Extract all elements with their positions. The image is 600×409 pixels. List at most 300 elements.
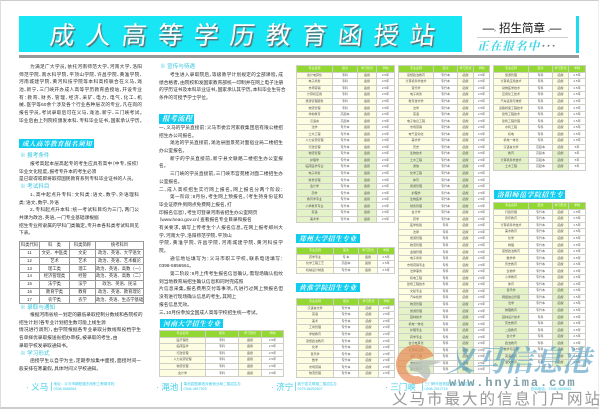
table: Huanghuai University majors: 函授 bbox=[365, 332, 372, 336]
table: majors column 3: 函授 bbox=[557, 99, 564, 103]
table: Huanghuai University majors: 2.5年 bbox=[383, 371, 390, 375]
table: Huanghuai University majors: 物流管理 bbox=[309, 371, 321, 375]
table: exam subject codes: 政治、英语、生态学基础 bbox=[96, 297, 143, 302]
section: eligibility: ※ 报考条件 bbox=[20, 153, 50, 159]
table: majors column 1: 专科 bbox=[342, 79, 348, 83]
intro paragraph: 为满足广大学员，依托河南师范大学、河南大学、洛阳 bbox=[30, 64, 142, 69]
table: Luoyang Normal University majors: 专业名称 bbox=[505, 203, 517, 207]
table: majors column 2: 函授 bbox=[462, 191, 468, 195]
table: Zhengzhou University majors: 专 本 bbox=[343, 255, 349, 259]
table: majors column 3: 5年 bbox=[575, 151, 579, 155]
table: majors column 2: 专升本 bbox=[441, 106, 450, 110]
table: Luoyang Normal University majors: 专升本 bbox=[536, 243, 545, 247]
table: majors column 2: 函授 bbox=[462, 250, 468, 254]
Yima address: 地址：义马市朝阳路东段职工教育学校 bbox=[54, 382, 115, 386]
table: majors column 1: 会计电算化 bbox=[307, 73, 322, 77]
table: exam subject codes: 13 bbox=[27, 266, 32, 271]
table: Huanghuai University majors: 英语 bbox=[312, 312, 318, 316]
table: majors column 1: 专升本 bbox=[340, 184, 350, 188]
table: majors column 3: 高起本 bbox=[536, 151, 545, 155]
table: majors column 2: 函授 bbox=[462, 256, 468, 260]
table: exam subject codes: 经管 bbox=[78, 273, 87, 278]
heading: Zhengzhou University majors: 郑州大学招生专业 bbox=[299, 233, 357, 243]
application process text: 片信息采集。报名费用交付等事项。凡进行过网上预报名但 bbox=[159, 286, 283, 291]
heading: Henan University majors: 河南大学招生专业 bbox=[163, 318, 221, 328]
table: Luoyang Normal University majors: 2.5年 bbox=[573, 243, 581, 247]
table: majors column 2: 2.5年 bbox=[478, 191, 485, 195]
table: majors column 2: 2.5年 bbox=[478, 335, 485, 339]
table: majors column 2: 2.5年 bbox=[478, 263, 485, 267]
table: majors column 2: 函授 bbox=[462, 263, 468, 267]
table: majors column 3: 动物医学技术 bbox=[502, 86, 520, 90]
table: majors column 2: 2.5年 bbox=[478, 256, 485, 260]
table: majors column 2: 电气自动化 bbox=[408, 132, 424, 136]
table: Luoyang Normal University majors: 小学教育 bbox=[505, 275, 517, 279]
table: majors column 1: 专升本 bbox=[340, 158, 350, 162]
table: majors column 2: 函授 bbox=[462, 145, 468, 149]
table: Luoyang Normal University majors: 函授 bbox=[557, 229, 564, 233]
table: Luoyang Normal University majors: 函授 bbox=[557, 301, 564, 305]
table: Luoyang Normal University majors: 网络信息管理 bbox=[502, 295, 520, 299]
application process text: 办公室报名。 bbox=[159, 148, 185, 153]
table: Luoyang Normal University majors: 专升本 bbox=[536, 249, 545, 253]
table: exam subject codes: 文史、中医类 bbox=[42, 250, 67, 255]
table: Luoyang Normal University majors: 物理 bbox=[508, 243, 514, 247]
table: majors column 3: 函授 bbox=[557, 119, 564, 123]
table: majors column 3: 专业名称 bbox=[505, 66, 517, 70]
table: majors column 2: 函授 bbox=[462, 125, 468, 129]
table: Luoyang Normal University majors: 2.5年 bbox=[573, 256, 581, 260]
table: majors column 3: 5年 bbox=[575, 158, 579, 162]
table: majors column 3: 计算机应用技术 bbox=[500, 79, 522, 83]
table: majors column 3: 专科 bbox=[537, 112, 544, 116]
table: majors column 2: 函授 bbox=[462, 112, 468, 116]
table: Huanghuai University majors: 专业名称 bbox=[309, 299, 321, 303]
table: majors column 1: 专科 bbox=[342, 106, 348, 110]
table: majors column 2: 电子商务 bbox=[410, 92, 422, 96]
table: majors column 2: 护理专业 bbox=[410, 328, 422, 332]
intro paragraph bbox=[19, 64, 142, 123]
Xinning address bbox=[295, 382, 348, 391]
application process text: 没有进行现场确认信息的考生，其网上 bbox=[159, 294, 236, 299]
table: majors column 1: 函授 bbox=[364, 125, 370, 129]
table: majors column 2: 专升本 bbox=[441, 204, 450, 208]
Xinning label: · 济宁 bbox=[271, 382, 293, 392]
table: majors column 3: 专科 bbox=[537, 99, 544, 103]
table: Luoyang Normal University majors: 美术教育 bbox=[505, 229, 517, 233]
admission text: 招生计划（各专业计划招生数可能上线生源 bbox=[19, 320, 106, 325]
table: majors column 2: 专升本 bbox=[441, 184, 450, 188]
table: majors column 2: 专科 bbox=[442, 302, 448, 306]
table: majors column 2: 市场营销专业 bbox=[407, 263, 425, 267]
table: majors column 2: 汽车检修 bbox=[410, 295, 422, 299]
table: majors column 1: 函授 bbox=[364, 164, 370, 168]
table: Zhengzhou University majors: 2.5年 bbox=[382, 261, 390, 265]
table: majors column 2: 专升本 bbox=[441, 151, 450, 155]
table: majors column 2: 文秘专业 bbox=[410, 289, 422, 293]
table: majors column 1: 函授 bbox=[364, 151, 370, 155]
table: Luoyang Normal University majors: 体育 bbox=[508, 282, 514, 286]
study format text: 般安排在寒暑假，具体时间义学校通知。 bbox=[19, 366, 99, 371]
table: majors column 2: 函授 bbox=[462, 367, 468, 371]
table: Luoyang Normal University majors: 英语教育 bbox=[505, 354, 517, 358]
table: majors column 2: 专科 bbox=[442, 230, 448, 234]
table: Luoyang Normal University majors: 专升本 bbox=[536, 210, 545, 214]
benefits text: 的学历证书及本科毕业证书，国家承认其学历。本科毕业生符合 bbox=[159, 87, 286, 92]
table: Luoyang Normal University majors: 2.5年 bbox=[573, 341, 581, 345]
table: majors column 2: 专科 bbox=[442, 250, 448, 254]
table: majors column 1: 2.5年 bbox=[382, 204, 389, 208]
table: majors column 1: 2.5年 bbox=[382, 79, 389, 83]
table: Luoyang Normal University majors: 函授 bbox=[557, 256, 564, 260]
table: majors column 2: 2.5年 bbox=[478, 348, 485, 352]
table: majors column 2: 2.5年 bbox=[478, 197, 485, 201]
table: majors column 3: 函授 bbox=[557, 112, 564, 116]
table: majors column 2: 2.5年 bbox=[478, 328, 485, 332]
table: majors column 1: 2.5年 bbox=[382, 164, 389, 168]
table: exam subject codes: 政治、英语、高数（一） bbox=[96, 266, 143, 271]
section: exam subjects: ※ 考试科目 bbox=[20, 184, 50, 190]
table: Luoyang Normal University majors: 2.5年 bbox=[573, 308, 581, 312]
table: majors column 2: 函授 bbox=[462, 276, 468, 280]
application process text: （www.heao.gov.cn）查看报名专业目录和报名 bbox=[159, 217, 252, 222]
table: Luoyang Normal University majors: 2.5年 bbox=[573, 269, 581, 273]
table: Luoyang Normal University majors: 函授 bbox=[557, 249, 564, 253]
table: Luoyang Normal University majors: 函授 bbox=[557, 216, 564, 220]
table: exam subject codes: 艺术 bbox=[78, 258, 87, 263]
table: majors column 2: 专升本 bbox=[441, 217, 450, 221]
table: majors column 1: 物流管理 bbox=[308, 151, 320, 155]
table: majors column 1: 函授 bbox=[364, 197, 370, 201]
table: majors column 3: 2.5年 bbox=[573, 92, 581, 96]
table: Luoyang Normal University majors: 函授 bbox=[557, 282, 564, 286]
table: majors column 2: 医学检验 bbox=[410, 223, 422, 227]
table: Luoyang Normal University majors: 函授 bbox=[557, 243, 564, 247]
table: majors column 1: 专升本 bbox=[340, 210, 350, 214]
table: Huanghuai University majors: 层次 bbox=[343, 299, 349, 303]
Xinning address: 新宁县文联路二楼招生办 bbox=[298, 382, 337, 386]
table: Luoyang Normal University majors: 二级教育 bbox=[505, 328, 517, 332]
table: majors column 3: 2.5年 bbox=[573, 125, 581, 129]
table: Luoyang Normal University majors: 函授 bbox=[557, 315, 564, 319]
table: exam subject codes: 11 bbox=[27, 250, 32, 255]
table: Luoyang Normal University majors: 语文教育 bbox=[505, 360, 517, 364]
table: exam subject codes: 科 类 bbox=[48, 242, 61, 247]
table: Luoyang Normal University majors: 函授 bbox=[557, 210, 564, 214]
table: majors column 3: 专科 bbox=[537, 79, 544, 83]
table: Huanghuai University majors: 2.5年 bbox=[383, 345, 390, 349]
table: Luoyang Normal University majors: 专科 bbox=[537, 354, 544, 358]
table: majors column 2: 专升本 bbox=[441, 119, 450, 123]
table: Luoyang Normal University majors: 函授 bbox=[557, 308, 564, 312]
table: majors column 1: 函授 bbox=[364, 112, 370, 116]
section: admission notice: ※ 录取与通知 bbox=[20, 305, 55, 311]
table: Luoyang Normal University majors: 生物学 bbox=[506, 269, 516, 273]
table: Henan University majors: 2.5年 bbox=[269, 357, 276, 361]
table: majors column 3: 5年 bbox=[575, 164, 579, 168]
table: majors column 2: 专升本 bbox=[441, 112, 450, 116]
table: majors column 2: 财务管理 bbox=[410, 204, 422, 208]
table: Henan University majors: 物流管理 bbox=[176, 364, 188, 368]
table: majors column 3: 专科 bbox=[537, 138, 544, 142]
table: majors column 3: 2.5年 bbox=[573, 99, 581, 103]
table: Luoyang Normal University majors: 函授 bbox=[557, 295, 564, 299]
admission text: 根据河南省统一划定的最低录取控制分数线和各院校的 bbox=[30, 312, 143, 317]
table: majors column 1: 2.5年 bbox=[382, 73, 389, 77]
table: majors column 1: 物流管理 bbox=[308, 106, 320, 110]
table: Luoyang Normal University majors: 函授 bbox=[557, 288, 564, 292]
table: Luoyang Normal University majors: 2.5年 bbox=[573, 295, 581, 299]
table: exam subject codes: 15 bbox=[27, 281, 32, 286]
application process text: 学院、黄淮学院、许昌学院、河南城建学院、黄河科技学 bbox=[159, 240, 283, 245]
application process text: 到当地教育局招生确认信息和同时完成照 bbox=[159, 279, 243, 284]
table: majors column 1: 专升本 bbox=[340, 132, 350, 136]
application process text: 二、成人高校招生实行网上报名。网上报名分两个阶段： bbox=[159, 186, 283, 192]
table: Luoyang Normal University majors: 园林设计技术 bbox=[502, 315, 520, 319]
table: Huanghuai University majors: 2.5年 bbox=[383, 365, 390, 369]
table: majors column 2: 函授 bbox=[462, 106, 468, 110]
table: majors column 2: 专升本 bbox=[441, 132, 450, 136]
table: exam subject codes: 14 bbox=[27, 273, 32, 278]
table: majors column 2: 函授 bbox=[462, 171, 468, 175]
table: majors column 1: 专升本 bbox=[340, 217, 350, 221]
table: Huanghuai University majors: 专升本 bbox=[341, 312, 350, 316]
table: majors column 2: 专科 bbox=[442, 256, 448, 260]
table: Huanghuai University majors: 思想政治教育 bbox=[306, 339, 324, 343]
table: majors column 2: 函授 bbox=[462, 328, 468, 332]
application process text: 渑池的学员直接前，渑池县图景苑对面宿业局二楼招生 bbox=[170, 140, 283, 145]
table: Huanghuai University majors: 函授 bbox=[365, 358, 372, 362]
table: majors column 2: 语文教育 bbox=[410, 367, 422, 371]
application process text: 名。 bbox=[159, 163, 166, 168]
table: exam subject codes: 科类代码 bbox=[21, 242, 38, 247]
table: Luoyang Normal University majors: 专升本 bbox=[536, 295, 545, 299]
table: majors column 1: 函授 bbox=[364, 79, 370, 83]
table: majors column 2: 2.5年 bbox=[478, 106, 485, 110]
table: majors column 3: 2.5年 bbox=[573, 86, 581, 90]
table: exam subject codes: 农学类 bbox=[48, 297, 61, 302]
table: majors column 1: 2.5年 bbox=[382, 210, 389, 214]
table: majors column 1: 2.5年 bbox=[382, 171, 389, 175]
table: majors column 2: 函授 bbox=[462, 322, 468, 326]
table: majors column 3: 专科 bbox=[537, 106, 544, 110]
table: majors column 2: 函授 bbox=[462, 230, 468, 234]
table: majors column 2: 2.5年 bbox=[478, 308, 485, 312]
table: majors column 2: 2.5年 bbox=[478, 125, 485, 129]
table: Huanghuai University majors: 化学 bbox=[312, 345, 318, 349]
table: majors column 2: 专升本 bbox=[441, 197, 450, 201]
table: Henan University majors: 医疗保险 bbox=[176, 338, 188, 342]
table: majors column 3: 专科 bbox=[537, 125, 544, 129]
table: majors column 2: 专升本 bbox=[441, 73, 450, 77]
table: Luoyang Normal University majors: 专升本 bbox=[536, 301, 545, 305]
table: majors column 2: 电子信息工程 bbox=[407, 119, 425, 123]
table: exam subject codes: 政治、英语、艺术概论 bbox=[98, 258, 141, 263]
table: Luoyang Normal University majors: 会计学 bbox=[506, 334, 516, 338]
table: Luoyang Normal University majors: 2.5年 bbox=[573, 334, 581, 338]
table: majors column 2: 2.5年 bbox=[478, 315, 485, 319]
table: exam subject codes: 政治、英语、大学语文 bbox=[98, 250, 141, 255]
table: majors column 2: 层次 bbox=[442, 66, 448, 70]
heading: Huanghuai University majors: 黄淮学院招生专业 bbox=[299, 282, 357, 292]
table: exam subject codes: 统考科目 bbox=[111, 242, 128, 247]
table: majors column 2: 函授 bbox=[462, 282, 468, 286]
table: Zhengzhou University majors: 2.5年 bbox=[382, 268, 390, 272]
table: Huanghuai University majors: 市场营销 bbox=[309, 365, 321, 369]
table: exam subject codes: 理工 bbox=[78, 266, 87, 271]
table: majors column 1: 专科 bbox=[342, 92, 348, 96]
table: Luoyang Normal University majors: 2.5年 bbox=[573, 354, 581, 358]
table: majors column 2: 专科 bbox=[442, 289, 448, 293]
table: Henan University majors: 行政管理 bbox=[176, 351, 188, 355]
table: majors column 2: 专升本 bbox=[441, 158, 450, 162]
table: Henan University majors: 2.5年 bbox=[269, 344, 276, 348]
table: majors column 2: 计算机应用 bbox=[408, 348, 424, 352]
table: Luoyang Normal University majors: 专升本 bbox=[536, 256, 545, 260]
application process text: 学、河南大学、洛阳师范学院、平顶山 bbox=[159, 233, 232, 238]
Yima address: 0398-5856561 bbox=[54, 387, 77, 391]
table: Huanghuai University majors: 专升本 bbox=[341, 345, 350, 349]
table: majors column 2: 专升本 bbox=[441, 125, 450, 129]
eligibility text: 是已取得或即将取得国民教育系列专科毕业证书的人员。 bbox=[19, 176, 134, 181]
table: majors column 1: 2.5年 bbox=[382, 86, 389, 90]
intro paragraph: 毕业后由上列院校颁发本科、专科毕业证书，国家承认学历。 bbox=[19, 118, 142, 123]
table: Henan University majors: 专业名称 bbox=[176, 331, 188, 335]
table: majors column 2: 函授 bbox=[462, 204, 468, 208]
table: majors column 2 bbox=[398, 65, 490, 374]
table: majors column 1: 2.5年 bbox=[382, 112, 389, 116]
table: majors column 2: 专科 bbox=[442, 354, 448, 358]
table: majors column 1: 行政管理 bbox=[308, 145, 320, 149]
table: majors column 2: 专科 bbox=[442, 243, 448, 247]
table: majors column 2: 生物医学 bbox=[410, 197, 422, 201]
exam subjects text: 2、专科起点升本科：统一考试科目均为三门，两门公 bbox=[30, 207, 139, 212]
table: exam subject codes: 艺术 bbox=[50, 258, 59, 263]
table: majors column 2: 电子商务 bbox=[410, 256, 422, 260]
table: majors column 2: 专科 bbox=[442, 295, 448, 299]
table: majors column 3: 教育 bbox=[508, 151, 514, 155]
table: majors column 2: 函授 bbox=[462, 184, 468, 188]
table: majors column 1: 护理学 bbox=[310, 158, 319, 162]
table: majors column 1: 2.5年 bbox=[382, 92, 389, 96]
table: Henan University majors: 学习形式 bbox=[244, 331, 256, 335]
table: Luoyang Normal University majors: 专升本 bbox=[536, 236, 545, 240]
table: Luoyang Normal University majors: 2.5年 bbox=[573, 301, 581, 305]
table: majors column 1: 2.5年 bbox=[382, 138, 389, 142]
table: Luoyang Normal University majors: 专科 bbox=[537, 360, 544, 364]
table: majors column 1: 函授 bbox=[364, 99, 370, 103]
application process text bbox=[159, 124, 283, 315]
application process text: 有关要求，填写上传考生个人报名信息。在网上报考郑州大 bbox=[159, 225, 283, 230]
table: majors column 1: 电子商务 bbox=[308, 79, 320, 83]
table: majors column 2: 函授 bbox=[462, 138, 468, 142]
table: Zhengzhou University majors: 函授 bbox=[365, 261, 371, 265]
table: Henan University majors: 函授 bbox=[247, 364, 253, 368]
table: majors column 2: 函授 bbox=[462, 243, 468, 247]
table: majors column 2: 专升本 bbox=[441, 145, 450, 149]
table: majors column 1: 专升本 bbox=[340, 164, 350, 168]
table: majors column 2: 2.5年 bbox=[478, 99, 485, 103]
table: majors column 2: 函授 bbox=[462, 295, 468, 299]
table: Luoyang Normal University majors: 2.5年 bbox=[573, 321, 581, 325]
table: majors column 1: 专升本 bbox=[340, 191, 350, 195]
table: Huanghuai University majors: 2.5年 bbox=[383, 312, 390, 316]
table: majors column 1: 2.5年 bbox=[382, 106, 389, 110]
table: majors column 3: 2.5年 bbox=[573, 106, 581, 110]
table: majors column 2: 函授 bbox=[462, 335, 468, 339]
Sanmenxia address: 0398-2912716 bbox=[424, 387, 448, 391]
table: majors column 3: 机电 bbox=[508, 132, 514, 136]
table: majors column 1: 函授 bbox=[364, 217, 370, 221]
table: majors column 2: 专科 bbox=[442, 223, 448, 227]
table: majors column 1: 专升本 bbox=[340, 125, 350, 129]
table: majors column 1: 2.5年 bbox=[382, 99, 389, 103]
table: majors column 3: 函授 bbox=[557, 86, 564, 90]
table: Luoyang Normal University majors: 专升本 bbox=[536, 223, 545, 227]
table: Luoyang Normal University majors: 2.5年 bbox=[573, 236, 581, 240]
table: majors column 1: 2.5年 bbox=[382, 217, 389, 221]
table: Henan University majors: 2.5年 bbox=[269, 338, 276, 342]
Mianchi address bbox=[181, 382, 242, 391]
table: majors column 2: 2.5年 bbox=[478, 119, 485, 123]
table: Luoyang Normal University majors: 音乐教育 bbox=[505, 216, 517, 220]
table: majors column 2: 旅游管理 bbox=[410, 236, 422, 240]
table: majors column 2: 物流管理 bbox=[410, 302, 422, 306]
table: majors column 2: 函授 bbox=[462, 302, 468, 306]
table: exam subject codes: 文史 bbox=[78, 250, 87, 255]
table: majors column 2: 2.5年 bbox=[478, 341, 485, 345]
table: majors column 3: 学制 bbox=[574, 66, 580, 70]
footer: Mianchi bbox=[156, 382, 241, 392]
exam subjects text bbox=[19, 192, 139, 235]
table: majors column 3: 2.5年 bbox=[573, 138, 581, 142]
table: majors column 1: 2.5年 bbox=[382, 119, 389, 123]
table: exam subject codes: 12 bbox=[27, 258, 32, 263]
table: Henan University majors: 专科 bbox=[219, 351, 225, 355]
table: majors column 1: 专业名称 bbox=[308, 66, 320, 70]
table: Zhengzhou University majors bbox=[296, 247, 395, 274]
watermark: logo bbox=[396, 344, 442, 384]
table: majors column 2: 通信 bbox=[413, 164, 419, 168]
table: Zhengzhou University majors: 2.5年 bbox=[382, 255, 390, 259]
table: Luoyang Normal University majors: 专升本 bbox=[536, 229, 545, 233]
intro paragraph: 有：教育、财务、管理、经济、采矿、电力、电气、化工、机 bbox=[19, 95, 142, 100]
table: Henan University majors: 专科 bbox=[219, 364, 225, 368]
table: majors column 3: 计算机科学技术 bbox=[500, 158, 522, 162]
table: majors column 3: 建筑工程管理 bbox=[502, 119, 520, 123]
application process text: 三门峡的学员直接前，三门峡市宫苑楼对面二楼招生办 bbox=[170, 171, 283, 176]
table: majors column 2: 学前教育 bbox=[410, 361, 422, 365]
table: Huanghuai University majors: 2.5年 bbox=[383, 325, 390, 329]
table: majors column 3: 层次 bbox=[537, 66, 544, 70]
table: Luoyang Normal University majors: 思想政治教育 bbox=[502, 249, 520, 253]
table: Luoyang Normal University majors: 2.5年 bbox=[573, 216, 581, 220]
table: majors column 1: 函授 bbox=[364, 73, 370, 77]
table: majors column 1: 药学 bbox=[311, 191, 318, 195]
table: majors column 2: 函授 bbox=[462, 119, 468, 123]
table: majors column 2: 2.5年 bbox=[478, 282, 485, 286]
eligibility text: 毕业文化程度，报考专升本的考生必须 bbox=[19, 169, 96, 174]
table: majors column 3: 2.5年 bbox=[573, 112, 581, 116]
table: majors column 2: 专升本 bbox=[441, 210, 450, 214]
table: majors column 2: 函授 bbox=[462, 99, 468, 103]
table: majors column 2: 2.5年 bbox=[478, 132, 485, 136]
table: majors column 1: 层次 bbox=[342, 66, 348, 70]
table: Zhengzhou University majors: 学习形式 bbox=[362, 248, 374, 252]
Sanmenxia label: · 三门峡 bbox=[385, 382, 416, 392]
table: majors column 3: 5年 bbox=[575, 145, 579, 149]
table: majors column 3: 函授 bbox=[557, 125, 564, 129]
